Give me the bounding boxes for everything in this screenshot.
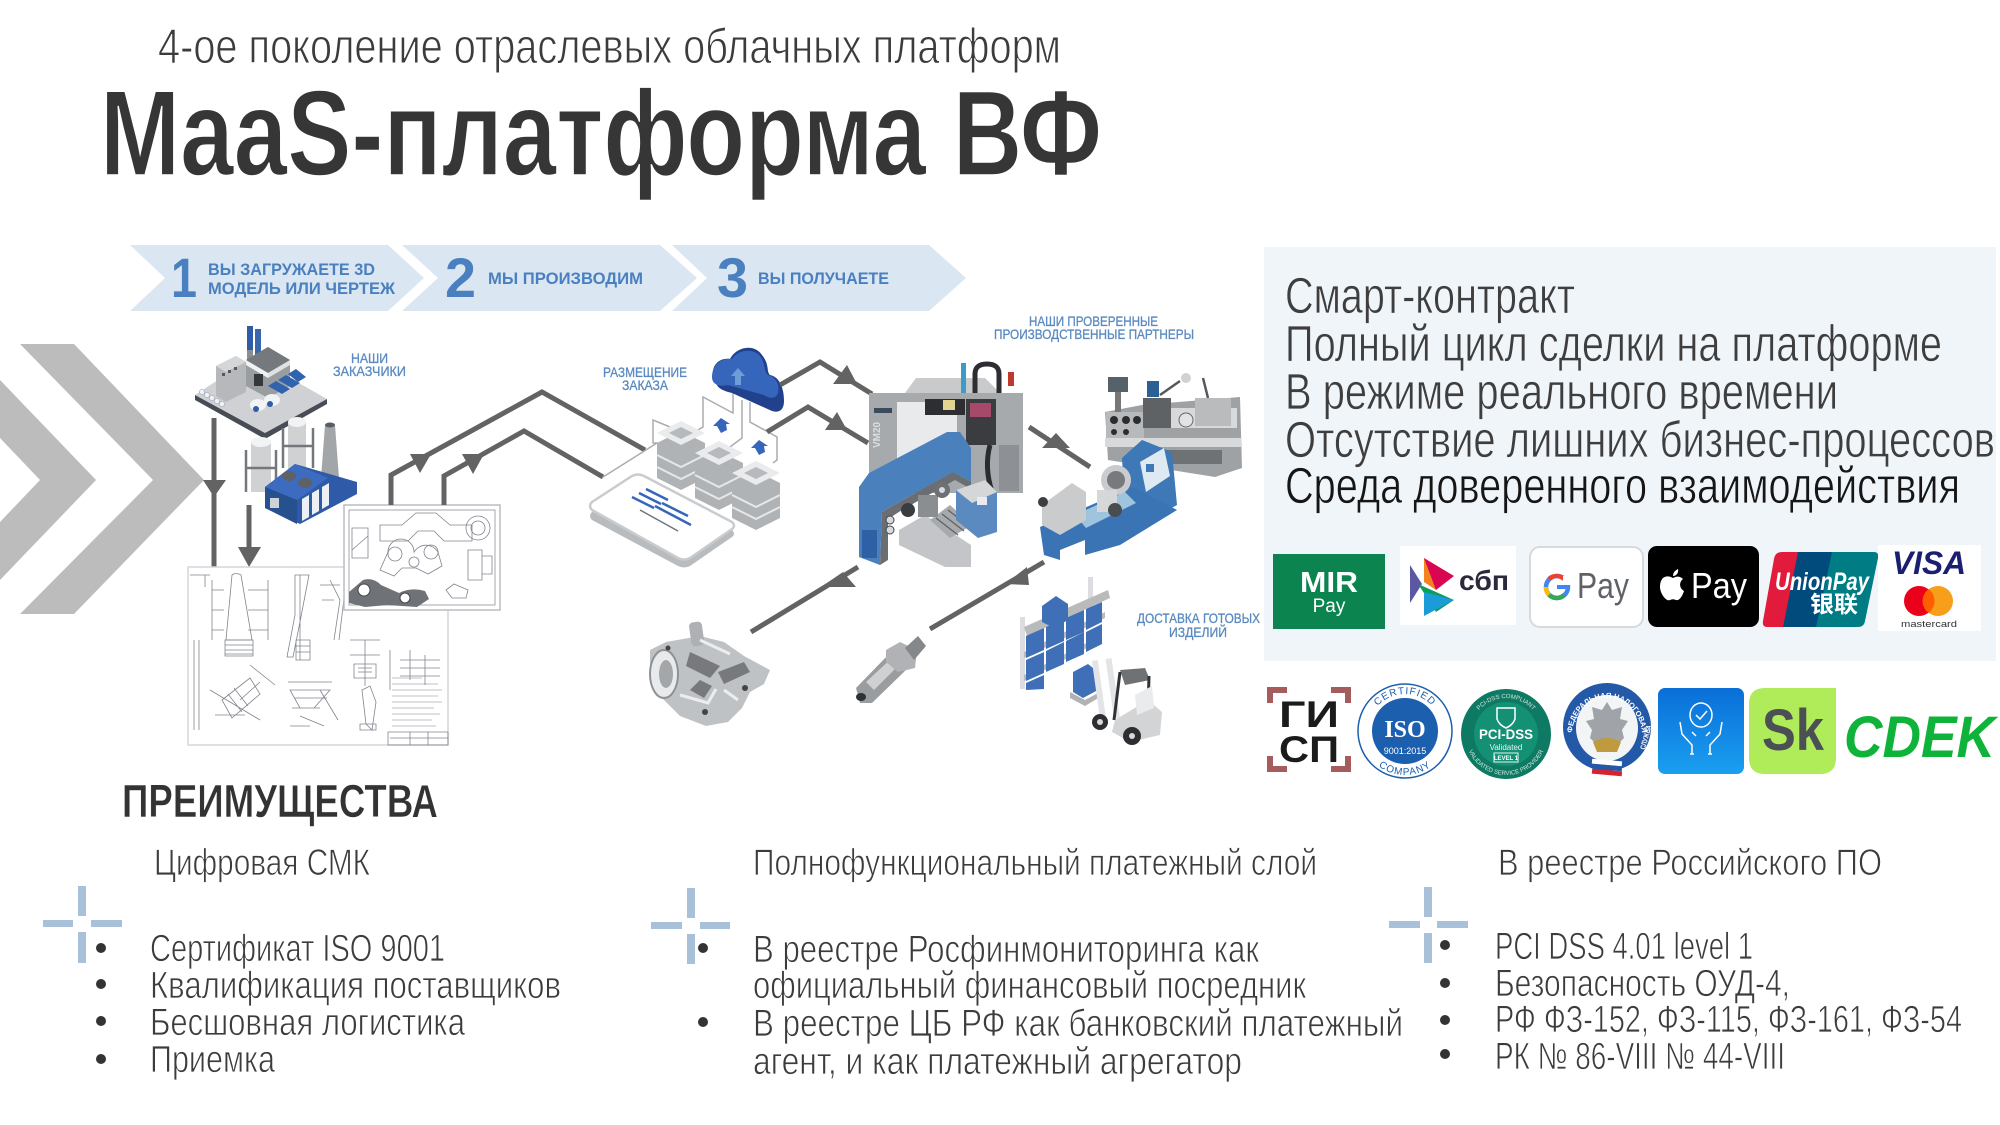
logo: trust hands [1658,688,1744,774]
step 1 [130,245,424,311]
logo: SBP [1400,546,1516,625]
icon: cross marker [1389,887,1468,963]
logo: Google Pay: Pay [1577,565,1629,606]
server stack 1 [657,421,705,490]
icon: metal casting [650,621,770,726]
icon: blue lathe [1038,440,1177,560]
step 3 [672,245,966,311]
bullet list: Безопасность ОУД-4, [1495,963,1790,1005]
badge: PCI DSS: PCI-DSS [1479,727,1533,742]
icon: CNC machine [859,363,1023,567]
logo: Apple Pay [1648,546,1759,627]
panel text [1285,267,1995,514]
bullet list: агент, и как платежный агрегатор [753,1041,1242,1083]
icon: cross marker [651,888,730,964]
return arrows [751,562,1044,632]
badge: Federal Tax Service [1563,683,1654,776]
panel text: Смарт-контракт [1285,267,1575,324]
title: MaaS-платформа ВФ [100,65,1102,201]
blueprint small [344,505,500,610]
label: order placement: ЗАКАЗА [622,378,668,393]
icon: plant with towers [245,417,357,524]
arrows from customers [203,418,261,567]
bullet list: Бесшовная логистика [150,1002,466,1044]
badge: PCI DSS [1461,689,1551,779]
bullet list: РК № 86-VIII № 44-VIII [1495,1036,1785,1078]
column: software registry: В реестре Российского ПО [1498,842,1882,883]
machine table [899,515,971,567]
badge: ISO: ISO [1384,717,1426,743]
panel text: В режиме реального времени [1285,363,1838,420]
bullet list [1440,926,1962,1078]
icon: tablet [590,474,734,568]
label: customers [333,351,406,379]
label: order placement [603,365,687,393]
bullet list: официальный финансовый посредник [753,965,1306,1007]
step 2 [402,245,697,311]
icon: customer factory [195,326,327,439]
label: order placement: РАЗМЕЩЕНИЕ [603,365,687,380]
column: payment layer: Полнофункциональный платежный слой [753,842,1317,883]
logo: UnionPay: 银联 [1810,591,1858,617]
logo: Skolkovo: Sk [1762,698,1825,763]
bullet list [96,928,561,1081]
bullet list: PCI DSS 4.01 level 1 [1495,926,1753,968]
bullet list: В реестре Росфинмониторинга как [753,929,1259,971]
badge: PCI DSS: Validated [1490,743,1522,752]
badge: PCI DSS: VALIDATED SERVICE PROVIDER [1469,749,1544,775]
heading: advantages: ПРЕИМУЩЕСТВА [122,775,438,827]
badge: ISO: COMPANY [1380,761,1428,776]
step 1: 1 [171,246,197,309]
step 1: МОДЕЛЬ ИЛИ ЧЕРТЕЖ [208,280,395,298]
logo: UnionPay: UnionPay [1775,568,1870,596]
label: partners: НАШИ ПРОВЕРЕННЫЕ [1029,314,1158,329]
arrow to partner lathes [1029,427,1090,467]
badge: ISO: CERTIFIED [1374,687,1435,704]
icon: servers [657,418,780,530]
icon: CNC machine: VM20 [872,421,883,448]
bullet list: Квалификация поставщиков [150,965,561,1007]
logo: GISP: СП [1279,729,1339,770]
bullet list [698,929,1403,1083]
logo: Mir Pay: Pay [1313,596,1346,617]
icon: hose fitting [856,636,926,703]
logo: Google Pay [1530,547,1643,627]
logo: SBP: сбп [1459,565,1509,596]
step banner [130,245,966,311]
column: digital QMS [43,842,561,1081]
icon: warehouse shelf [1020,577,1110,706]
subtitle: 4-ое поколение отраслевых облачных платформ [158,20,1061,74]
icon: cloud [712,348,784,412]
icon: cross marker [43,886,122,963]
logo: Apple Pay: Pay [1691,565,1747,606]
label: delivery [1137,611,1260,640]
logo: Skolkovo [1749,688,1836,774]
badge: ISO: 9001:2015 [1384,746,1426,756]
badge: ISO [1357,683,1453,779]
step 3: ВЫ ПОЛУЧАЕТЕ [758,270,889,288]
blue arch [859,432,971,565]
icon: forklift [1092,658,1162,745]
logo: GISP [1270,690,1348,770]
label: customers: НАШИ [351,351,388,366]
step 2: 2 [445,246,476,309]
logo: Visa Mastercard [1878,545,1981,631]
label: partners [994,314,1194,342]
badge: Federal Tax Service: СЛУЖБА [1638,724,1654,751]
decorative chevrons [0,344,204,614]
badge: PCI DSS: LEVEL 1 [1494,756,1519,762]
control box [956,480,997,538]
column: payment layer [651,842,1403,1083]
cables between cloud, servers and tablet [603,393,777,477]
bullet list: Сертификат ISO 9001 [150,928,445,970]
column: software registry [1389,842,1962,1078]
server stack 2 [695,441,743,510]
flow lines to platform [391,392,645,505]
logo: Visa Mastercard: VISA [1892,545,1966,581]
step 3: 3 [717,246,748,309]
badge: PCI DSS: PCI-DSS COMPLIANT [1476,694,1536,710]
bullet list: Приемка [150,1039,276,1081]
blueprint large [188,567,448,745]
logo: Mir Pay: MIR [1300,567,1358,599]
logo: UnionPay [1763,552,1878,627]
label: delivery: ДОСТАВКА ГОТОВЫХ [1137,611,1260,626]
logo: Mir Pay [1273,554,1385,629]
logo: GISP: ГИ [1279,694,1339,735]
badge: Federal Tax Service: ФЕДЕРАЛЬНАЯ НАЛОГОВАЯ [1567,692,1647,732]
icon: lathe photo [1105,373,1242,477]
step 2: МЫ ПРОИЗВОДИМ [488,270,643,288]
column: digital QMS: Цифровая СМК [154,842,370,883]
step 1: ВЫ ЗАГРУЖАЕТЕ 3D [208,261,375,279]
panel: smart contract [1264,247,1996,661]
bullet list: В реестре ЦБ РФ как банковский платежный [753,1003,1403,1045]
server stack 3 [732,461,780,530]
label: delivery: ИЗДЕЛИЙ [1169,625,1227,640]
logo: Visa Mastercard: mastercard [1901,619,1957,630]
label: customers: ЗАКАЗЧИКИ [333,364,406,379]
label: partners: ПРОИЗВОДСТВЕННЫЕ ПАРТНЕРЫ [994,327,1194,342]
flow lines from cloud to machine [767,362,872,443]
